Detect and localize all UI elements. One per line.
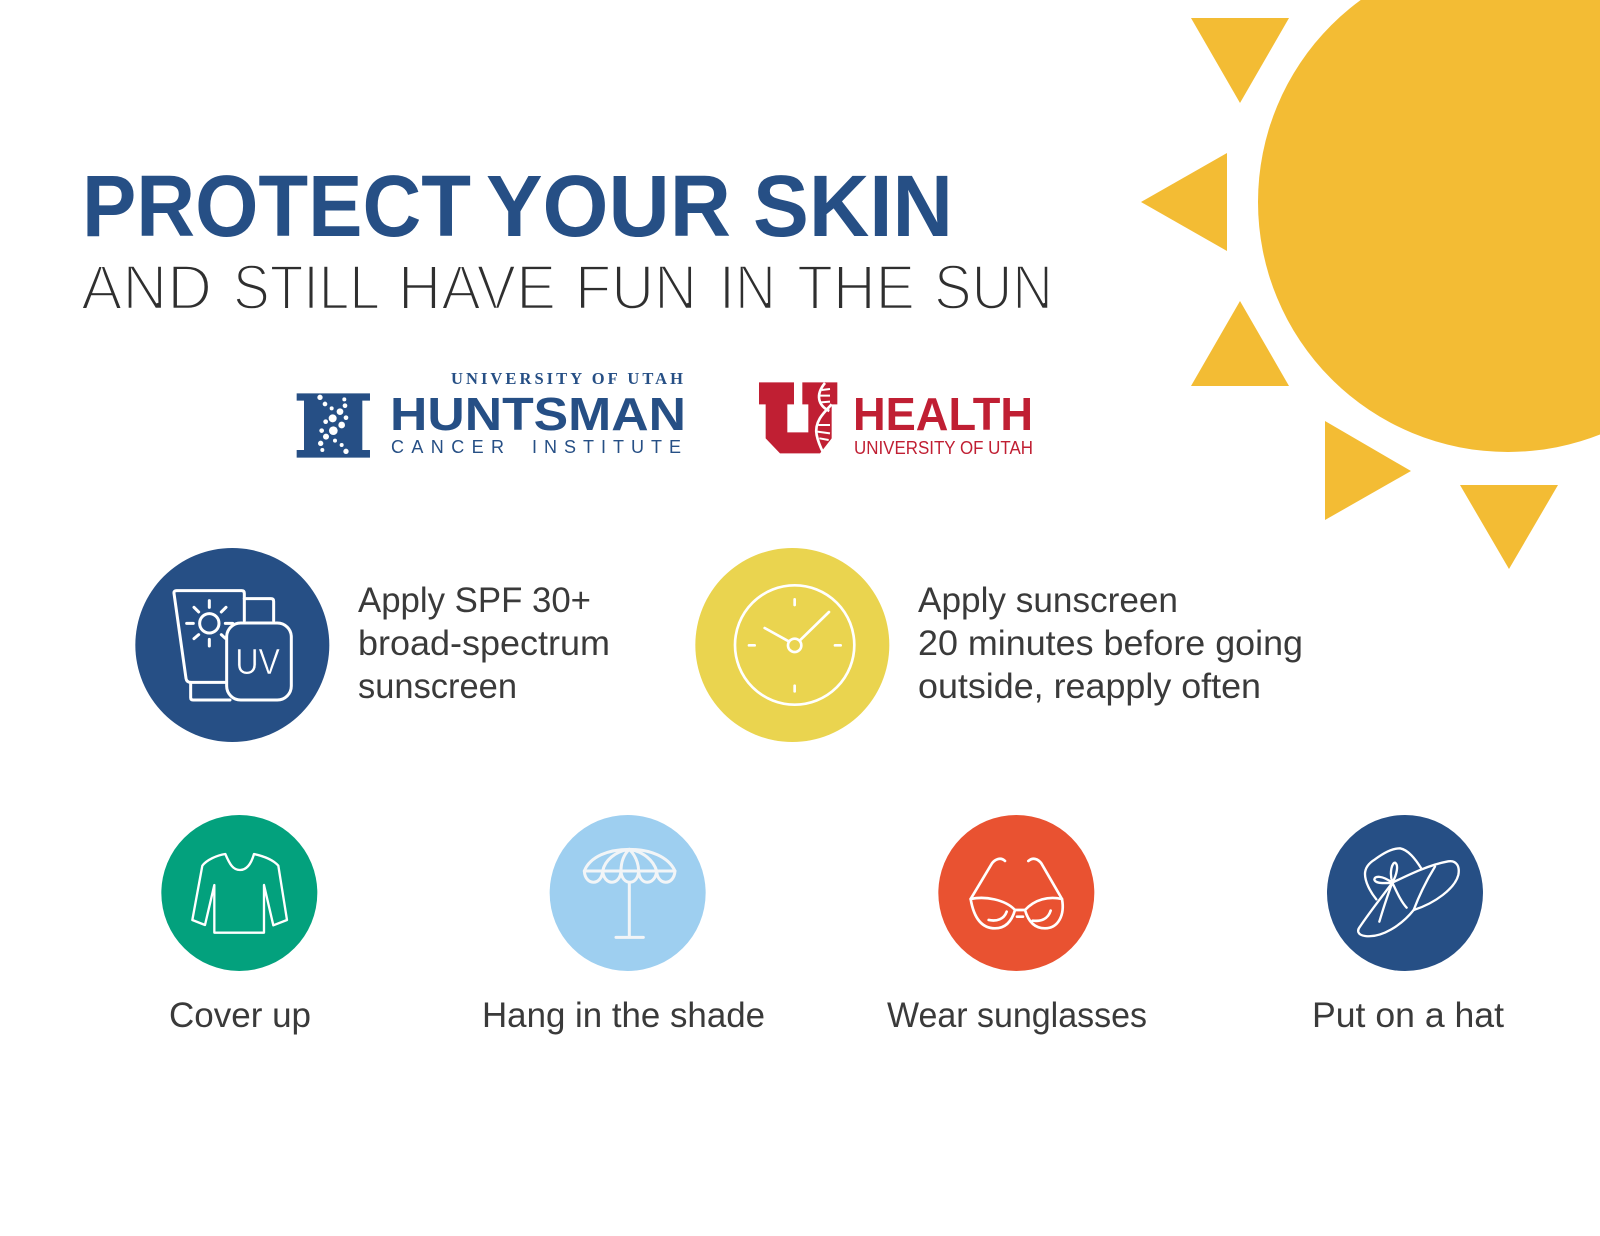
- label: hat: Put on a hat: [1312, 996, 1504, 1035]
- text: apply sunscreen: 20 minutes before going: [918, 624, 1303, 663]
- icon: red U with DNA: [759, 382, 837, 454]
- subtitle: FUN: [575, 253, 697, 323]
- logo text: Health: HEALTH: [853, 388, 1033, 440]
- title: YOUR: [486, 158, 731, 255]
- text: apply SPF: broad-spectrum: [358, 624, 610, 663]
- text: apply sunscreen: Apply sunscreen: [918, 581, 1178, 620]
- label: sunglasses: Wear sunglasses: [887, 996, 1147, 1035]
- logo: Huntsman Cancer Institute: [297, 369, 686, 458]
- icon: sunglasses: [938, 815, 1094, 971]
- title: SKIN: [753, 158, 953, 255]
- text: apply SPF: Apply SPF 30+: [358, 581, 591, 620]
- text: apply sunscreen: [918, 581, 1303, 706]
- subtitle: [81, 253, 1053, 323]
- icon: clock: [695, 548, 889, 742]
- subtitle: IN: [719, 253, 776, 323]
- logo text: Cancer Institute: INSTITUTE: [532, 437, 681, 457]
- icon: hat: [1327, 815, 1483, 971]
- subtitle: SUN: [934, 253, 1053, 323]
- logo text: University of Utah: UNIVERSITY OF UTAH: [451, 369, 683, 388]
- icon: sunscreen: [135, 548, 329, 742]
- logo text: Cancer Institute: CANCER: [391, 437, 504, 457]
- title: PROTECT: [82, 158, 471, 255]
- text: apply sunscreen: outside, reapply often: [918, 667, 1261, 706]
- logo text: Huntsman: HUNTSMAN: [390, 388, 686, 440]
- sun graphic: [1141, 0, 1600, 569]
- subtitle: THE: [797, 253, 915, 323]
- text: apply SPF: sunscreen: [358, 667, 517, 706]
- subtitle: AND: [81, 253, 212, 323]
- icon: sunscreen: UV: [235, 641, 280, 682]
- title: [82, 158, 953, 255]
- icon: Huntsman H mark: [297, 393, 370, 458]
- logo: University of Utah Health: [759, 382, 1033, 458]
- logo text: Cancer Institute: [391, 437, 681, 457]
- text: apply SPF: [358, 581, 610, 706]
- subtitle: STILL: [233, 253, 380, 323]
- icon: umbrella: [550, 815, 706, 971]
- logo text: University of Utah: UNIVERSITY OF UTAH: [854, 438, 1033, 458]
- label: cover up: Cover up: [169, 996, 311, 1035]
- label: shade: Hang in the shade: [482, 996, 765, 1035]
- subtitle: HAVE: [398, 253, 556, 323]
- icon: shirt: [161, 815, 317, 971]
